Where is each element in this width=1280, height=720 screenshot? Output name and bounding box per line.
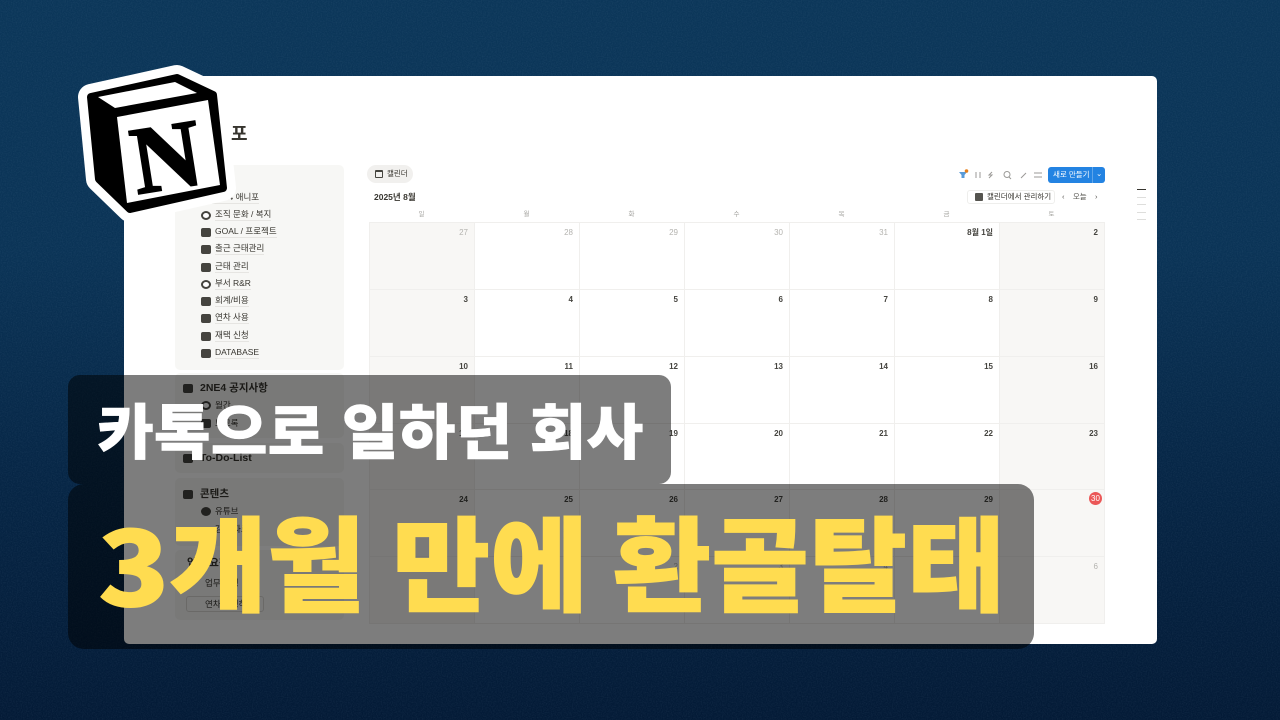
calendar grid: 6 [779, 295, 783, 304]
icon: notion logo [78, 65, 236, 220]
calendar grid: 10 [459, 362, 468, 371]
calendar grid: 6 [1094, 562, 1098, 571]
panel: contents: 유튜브 [215, 506, 238, 516]
panel: notices: 보고록 [215, 418, 238, 428]
calendar grid: 27 [459, 228, 468, 237]
weekday headers: 월 [524, 211, 529, 218]
calendar grid [369, 222, 1105, 624]
panel: contents: 콘텐츠 [200, 488, 229, 500]
panel: sidebar menu [175, 165, 344, 370]
headline bar 1 [68, 375, 671, 484]
manage in calendar button: 캘린더에서 관리하기 [987, 192, 1051, 201]
sidebar menu items: 재택 신청 [215, 330, 249, 340]
calendar grid: 27 [774, 495, 783, 504]
calendar grid: 20 [774, 428, 783, 438]
headline line 2: 3 [98, 487, 169, 636]
calendar grid: 4 [884, 562, 888, 571]
calendar grid: 25 [564, 495, 573, 504]
calendar grid: 17 [459, 428, 468, 438]
sidebar menu items: 조직 문화 / 복지 [215, 209, 271, 219]
calendar grid: 8 [989, 295, 993, 304]
weekday headers: 금 [944, 211, 949, 218]
panel: to-do list: To-Do-List [200, 452, 252, 464]
calendar grid: 29 [984, 495, 993, 504]
new button [1048, 167, 1105, 183]
weekday headers: 수 [734, 211, 739, 218]
panel: contents [175, 478, 344, 546]
panel: requests: 연차 신청하기 [205, 599, 254, 609]
calendar grid: 12 [669, 362, 678, 371]
calendar grid: 24 [459, 495, 468, 504]
icon: notion logo: N [124, 98, 209, 215]
calendar grid: 28 [564, 228, 573, 237]
panel: to-do list [175, 443, 344, 473]
calendar grid: 5 [989, 562, 993, 571]
calendar grid: 13 [774, 362, 783, 371]
headline bar 2 [68, 484, 1034, 649]
sidebar menu items: 회계/비용 [215, 295, 249, 305]
calendar grid: 4 [569, 295, 573, 304]
calendar grid: 31 [459, 562, 468, 571]
calendar grid: 2 [1094, 228, 1098, 237]
calendar grid: 30 [774, 228, 783, 237]
calendar grid: 2 [674, 562, 678, 571]
weekday headers [418, 210, 1054, 218]
calendar grid: 23 [1089, 428, 1098, 438]
panel: notices: 월간 [215, 400, 231, 410]
panel: requests: 업무 요청 [187, 557, 229, 569]
calendar grid: 3 [464, 295, 468, 304]
calendar grid: 5 [674, 295, 678, 304]
sidebar menu items: 부서 R&R [215, 278, 251, 288]
today badge [1089, 492, 1102, 505]
calendar grid: 26 [669, 495, 678, 504]
calendar grid: 1 [569, 562, 573, 571]
calendar grid: 11 [565, 362, 573, 371]
sidebar menu items: GOAL / 프로젝트 [215, 226, 277, 236]
calendar grid: 3 [779, 562, 783, 571]
calendar grid: 18 [564, 428, 573, 438]
calendar grid: 31 [879, 228, 888, 237]
calendar tab: 캘린더 [387, 169, 408, 178]
headline line 1: 카톡으로 일하던 회사 [97, 385, 643, 472]
calendar grid: 16 [1089, 362, 1098, 371]
sidebar menu items [201, 192, 277, 359]
panel: notion page card [124, 76, 1157, 644]
sidebar menu items: 근태 관리 [215, 261, 249, 271]
calendar grid: 29 [669, 228, 678, 237]
calendar grid: 22 [984, 428, 993, 438]
sidebar menu items: 출근 근태관리 [215, 243, 264, 253]
calendar grid: 28 [879, 495, 888, 504]
page title: 포 [231, 124, 248, 144]
headline line 2: 개월 만에 환골탈태 [169, 484, 1005, 633]
sidebar menu items: DATABASE [215, 347, 259, 357]
calendar grid: 19 [669, 428, 678, 438]
weekday headers: 화 [628, 211, 634, 218]
calendar grid: 15 [984, 362, 993, 371]
calendar grid: 14 [879, 362, 888, 371]
weekday headers: 토 [1048, 211, 1054, 218]
panel: contents: 강의 자료 [215, 524, 249, 534]
today badge: 30 [1091, 494, 1100, 503]
panel: notices: 2NE4 공지사항 [200, 382, 268, 394]
sidebar menu items: 연차 사용 [215, 312, 249, 322]
panel: notices [175, 373, 344, 438]
toolbar icons [959, 169, 1042, 180]
panel: requests [175, 550, 344, 620]
calendar grid: 9 [1094, 295, 1098, 304]
weekday headers: 일 [418, 211, 424, 218]
calendar month heading: 2025년 8월 [374, 192, 416, 202]
new button: 새로 만들기 [1053, 170, 1090, 179]
new button: ⌄ [1096, 169, 1102, 178]
sidebar menu items: 2NE4 애니포 [212, 192, 259, 202]
calendar grid: 21 [879, 428, 888, 438]
panel: requests: 업무 요청 [205, 578, 239, 588]
page outline [1137, 189, 1146, 220]
calendar grid: 8월 1일 [967, 228, 993, 237]
calendar grid: 7 [884, 295, 888, 304]
weekday headers: 목 [838, 211, 844, 218]
calendar tab [367, 165, 413, 183]
today navigation: ‹ 오늘 › [1062, 192, 1097, 201]
manage in calendar button [967, 190, 1055, 204]
